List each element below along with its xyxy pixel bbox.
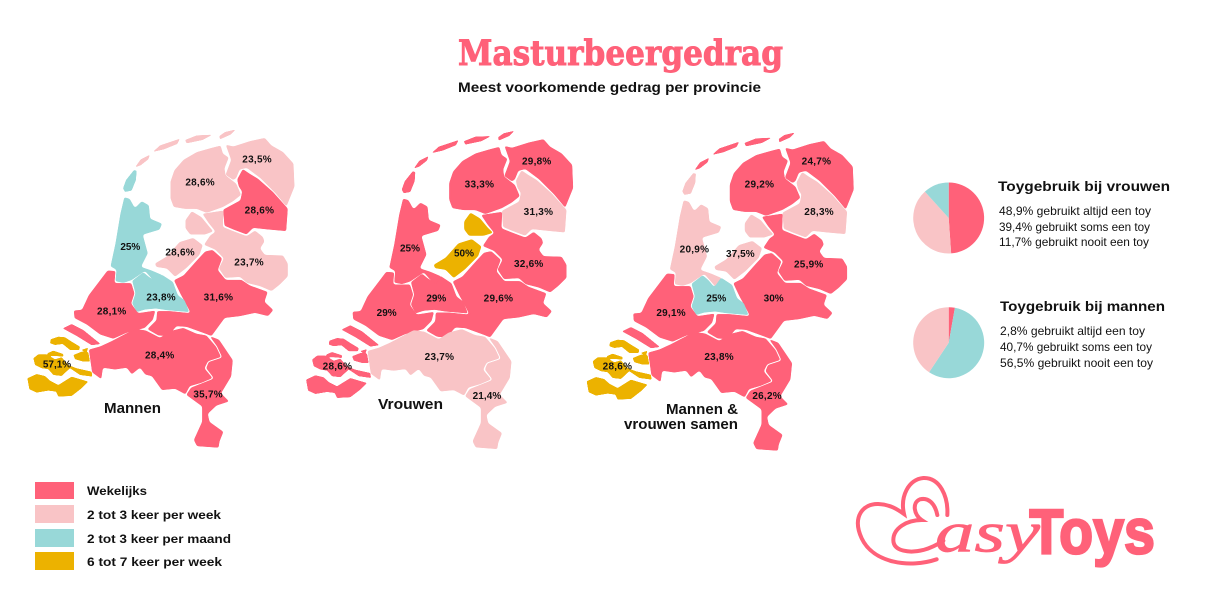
- map: vrouwen: [306, 131, 574, 450]
- subtitle: Meest voorkomende gedrag per provincie: [458, 79, 761, 95]
- map: mannen: [27, 129, 295, 448]
- percent labels: vrouwen: 32,6%: [514, 259, 543, 270]
- percent labels: vrouwen: 28,6%: [323, 361, 352, 372]
- percent labels: samen: 37,5%: [726, 249, 755, 260]
- percent labels: vrouwen: 29,6%: [484, 294, 513, 305]
- percent labels: mannen: 28,6%: [185, 178, 215, 189]
- stats: vrouwen: 11,7% gebruikt nooit een toy: [999, 235, 1149, 249]
- percent labels: samen: 23,8%: [704, 352, 734, 363]
- stats: vrouwen: 48,9% gebruikt altijd een toy: [999, 204, 1151, 218]
- map caption: samen: vrouwen samen: [624, 416, 738, 433]
- map caption: vrouwen: Vrouwen: [378, 396, 443, 413]
- legend item: 6 tot 7 keer per week: 6 tot 7 keer per week: [87, 555, 222, 569]
- percent labels: vrouwen: 31,3%: [524, 207, 553, 218]
- percent labels: samen: 25%: [706, 294, 726, 305]
- stats: mannen: 40,7% gebruikt soms een toy: [1000, 340, 1152, 354]
- logo text: Toys: Toys: [1029, 497, 1155, 567]
- percent labels: mannen: 28,6%: [245, 205, 274, 216]
- percent labels: samen: [603, 156, 834, 402]
- percent labels: vrouwen: 29,8%: [522, 156, 551, 167]
- title: Masturbeergedrag: [458, 33, 783, 74]
- percent labels: mannen: 28,6%: [165, 248, 195, 259]
- percent labels: vrouwen: 33,3%: [465, 179, 494, 190]
- heading: vrouwen: Toygebruik bij vrouwen: [998, 178, 1170, 194]
- percent labels: samen: 26,2%: [752, 391, 782, 402]
- percent labels: samen: 29,1%: [656, 308, 686, 319]
- percent labels: mannen: 23,7%: [234, 258, 264, 269]
- percent labels: vrouwen: 29%: [426, 294, 446, 305]
- percent labels: mannen: 23,5%: [242, 155, 272, 166]
- percent labels: vrouwen: [323, 156, 553, 402]
- panel: toygebruik mannen: [913, 298, 1165, 378]
- stats: mannen: 2,8% gebruikt altijd een toy: [1000, 324, 1145, 338]
- stats: mannen: [1000, 324, 1153, 370]
- percent labels: vrouwen: 29%: [377, 308, 397, 319]
- percent labels: samen: 30%: [764, 294, 784, 305]
- percent labels: mannen: 28,4%: [145, 350, 174, 361]
- map shapes: mannen: [27, 129, 295, 448]
- percent labels: samen: 28,3%: [804, 207, 834, 218]
- percent labels: samen: 25,9%: [794, 259, 823, 270]
- legend item: 6 tot 7 keer per week: [35, 552, 222, 570]
- percent labels: mannen: 57,1%: [43, 360, 71, 371]
- map: mannen en vrouwen samen: [587, 132, 854, 451]
- map shapes: mannen en vrouwen samen: [587, 132, 854, 451]
- percent labels: samen: 20,9%: [680, 244, 709, 255]
- percent labels: mannen: [43, 155, 274, 401]
- pie chart: vrouwen: [913, 182, 984, 253]
- percent labels: vrouwen: 50%: [454, 249, 474, 260]
- percent labels: samen: 28,6%: [603, 361, 632, 372]
- percent labels: mannen: 25%: [120, 242, 140, 253]
- percent labels: vrouwen: 23,7%: [425, 352, 454, 363]
- stats: vrouwen: [999, 204, 1151, 249]
- legend item: wekelijks: Wekelijks: [87, 484, 147, 498]
- percent labels: mannen: 31,6%: [204, 293, 233, 304]
- logo: EasyToys: [858, 478, 1155, 567]
- percent labels: vrouwen: 21,4%: [473, 391, 501, 402]
- logo swirl: heart and E: [858, 478, 947, 563]
- percent labels: vrouwen: 25%: [400, 244, 420, 255]
- legend: [35, 482, 231, 570]
- percent labels: mannen: 28,1%: [97, 307, 126, 318]
- percent labels: samen: 24,7%: [802, 156, 831, 167]
- map caption: samen: [624, 401, 738, 433]
- legend item: 2 tot 3 keer per week: 2 tot 3 keer per week: [87, 508, 221, 522]
- panel: toygebruik vrouwen: [913, 178, 1170, 253]
- stats: vrouwen: 39,4% gebruikt soms een toy: [999, 220, 1150, 234]
- percent labels: mannen: 35,7%: [193, 390, 223, 401]
- pie chart: mannen: [913, 307, 984, 378]
- stats: mannen: 56,5% gebruikt nooit een toy: [1000, 356, 1153, 370]
- map caption: samen: Mannen &: [666, 401, 738, 418]
- logo text: Easy: asy: [935, 503, 1041, 565]
- percent labels: samen: 29,2%: [745, 179, 774, 190]
- legend item: 2 tot 3 keer per week: [35, 505, 221, 523]
- map shapes: vrouwen: [306, 131, 574, 450]
- legend item: 2 tot 3 keer per maand: [35, 529, 231, 547]
- map caption: mannen: Mannen: [104, 400, 161, 417]
- heading: mannen: Toygebruik bij mannen: [1000, 298, 1165, 314]
- legend item: wekelijks: [35, 482, 147, 499]
- percent labels: mannen: 23,8%: [146, 293, 176, 304]
- legend item: 2 tot 3 keer per maand: 2 tot 3 keer per maand: [87, 532, 231, 546]
